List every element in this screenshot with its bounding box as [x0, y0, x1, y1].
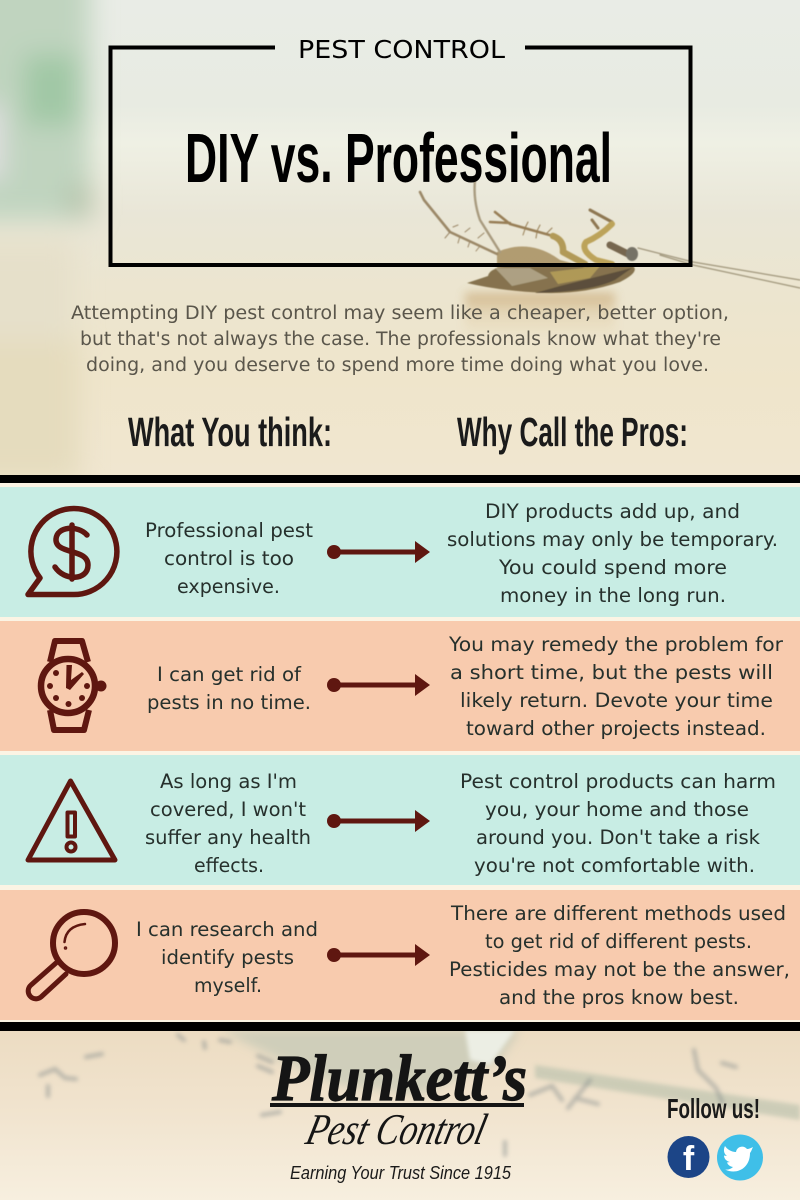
intro paragraph: doing, and you deserve to spend more time doing what you love.	[86, 355, 709, 376]
cockroach photo	[420, 180, 800, 341]
response: pests return: toward other projects instead.	[466, 717, 766, 740]
statement: covered: effects.	[194, 854, 264, 877]
tagline: Earning Your Trust Since 1915	[290, 1163, 512, 1183]
statement: too expensive: control is too	[164, 547, 294, 570]
row 4: research	[0, 890, 800, 1020]
row 2: time	[0, 621, 800, 751]
response: products can harm	[460, 770, 776, 877]
response: pests return: You may remedy the problem for	[448, 633, 784, 656]
top black band	[0, 475, 800, 483]
response: products can harm: you're not comfortable with.	[474, 854, 755, 877]
logo: Plunkett's Pest Control	[270, 1042, 527, 1154]
bottom black band	[0, 1022, 800, 1031]
statement: too expensive: Professional pest	[145, 519, 313, 542]
response: products can harm: around you. Don't take a risk	[476, 826, 761, 849]
column heading: what you think: What You think:	[128, 409, 332, 455]
statement: no time: pests in no time.	[147, 691, 311, 714]
intro paragraph	[71, 303, 729, 376]
response: different methods	[449, 902, 790, 1009]
icon: facebook: f	[683, 1140, 695, 1178]
icon: wristwatch	[41, 641, 106, 730]
statement: too expensive: expensive.	[177, 575, 280, 598]
response: different methods: and the pros know best.	[499, 986, 739, 1009]
icon: dollar speech bubble	[28, 509, 117, 595]
response: products can harm: Pest control products can harm	[460, 770, 776, 793]
response: pests return: likely return. Devote your time	[460, 689, 773, 712]
statement: research: myself.	[194, 974, 262, 997]
arrow	[327, 944, 430, 966]
response: costs add up: money in the long run.	[500, 584, 726, 607]
arrow	[327, 674, 430, 696]
response: different methods: Pesticides may not be the answer,	[449, 958, 790, 981]
statement: research: identify pests	[161, 946, 294, 969]
icon: warning triangle	[28, 781, 115, 860]
intro paragraph: but that's not always the case. The professionals know what they're	[80, 329, 721, 350]
statement: no time: I can get rid of	[157, 663, 302, 686]
intro paragraph: Attempting DIY pest control may seem like a cheaper, better option,	[71, 303, 729, 324]
response: costs add up: solutions may only be temporary.	[447, 528, 778, 551]
row 3: health	[0, 755, 800, 885]
statement: covered: covered, I won't	[150, 798, 306, 821]
response: pests return	[448, 633, 784, 740]
logo: Plunkett's Pest Control: Plunkett’s	[271, 1042, 527, 1115]
eyebrow: PEST CONTROL: PEST CONTROL	[298, 35, 505, 64]
top photo background	[0, 0, 800, 480]
icon: twitter	[717, 1134, 763, 1180]
response: pests return: a short time, but the pests will	[450, 661, 773, 684]
response: different methods: There are different methods used	[450, 902, 786, 925]
icon: facebook	[668, 1136, 710, 1178]
statement: covered	[145, 770, 311, 877]
statement: covered: suffer any health	[145, 826, 311, 849]
statement: too expensive	[145, 519, 313, 598]
response: costs add up: You could spend more	[498, 556, 727, 579]
statement: covered: As long as I'm	[160, 770, 297, 793]
title frame	[110, 48, 690, 265]
logo: Plunkett's Pest Control: Pest Control	[301, 1105, 492, 1154]
arrow	[327, 810, 430, 832]
arrow	[327, 541, 430, 563]
response: products can harm: you, your home and those	[485, 798, 749, 821]
statement: research	[136, 918, 318, 997]
row 1: expense	[0, 487, 800, 617]
icon: magnifying glass	[28, 912, 115, 999]
response: different methods: to get rid of different pests.	[485, 930, 752, 953]
response: costs add up: DIY products add up, and	[485, 500, 740, 523]
statement: no time	[147, 663, 311, 714]
bottom section background	[0, 476, 800, 1200]
statement: research: I can research and	[136, 918, 318, 941]
response: costs add up	[447, 500, 778, 607]
